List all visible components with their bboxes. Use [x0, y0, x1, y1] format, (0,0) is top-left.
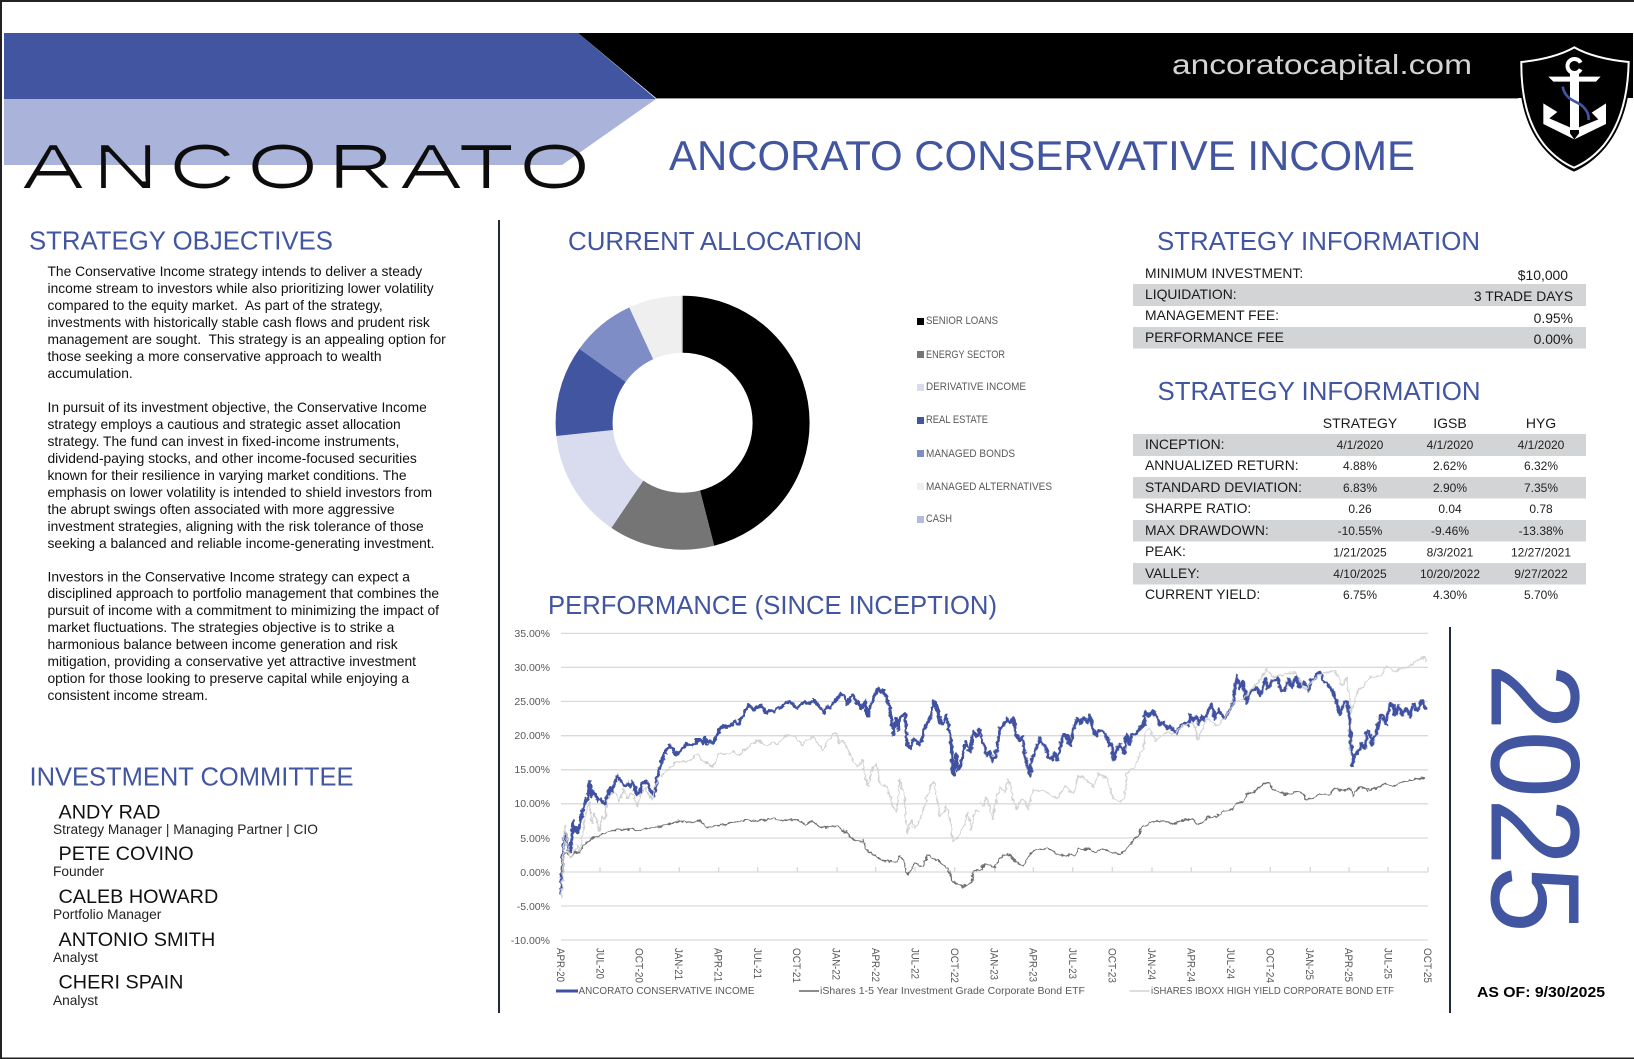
x axis labels: OCT-20 — [632, 948, 644, 983]
table: performance statistics: 10/20/2022 — [1420, 567, 1480, 581]
series: ancorato conservative income — [561, 672, 1426, 893]
heading: investment committee: INVESTMENT COMMITTEE — [30, 762, 354, 792]
panel: committee members: PETE COVINO — [58, 843, 194, 865]
text block: strategy objectives: accumulation. — [48, 365, 133, 381]
x axis labels — [554, 948, 1433, 983]
x axis labels: JUL-21 — [751, 948, 763, 979]
text block: strategy objectives: those seeking a more conservative approach to wealth — [48, 348, 382, 364]
panel: committee members: Founder — [53, 864, 105, 879]
table: performance statistics: 6.75% — [1343, 588, 1377, 602]
panel: committee members: Analyst — [53, 950, 98, 965]
panel: committee members — [53, 801, 318, 1008]
series: ishares iboxx high yield corporate bond etf — [561, 657, 1426, 897]
donut legend: ENERGY SECTOR — [926, 349, 1005, 361]
x axis labels: OCT-23 — [1106, 948, 1118, 983]
table: performance statistics: 7.35% — [1524, 481, 1558, 495]
chart legend: iShares 1-5 Year Investment Grade Corporate Bond ETF — [820, 985, 1085, 997]
table: performance statistics: IGSB — [1433, 415, 1467, 431]
y axis labels: 0.00% — [520, 867, 550, 879]
table: performance statistics: 2.62% — [1433, 459, 1467, 473]
table: strategy terms: 0.95% — [1534, 310, 1573, 326]
y axis labels: 30.00% — [514, 662, 550, 674]
heading: performance: PERFORMANCE (SINCE INCEPTION) — [548, 590, 997, 620]
x axis labels: JUL-20 — [594, 948, 606, 979]
panel: committee members: ANTONIO SMITH — [58, 929, 215, 951]
table: strategy terms: LIQUIDATION: — [1145, 286, 1237, 302]
y axis labels: -10.00% — [511, 935, 550, 947]
panel: committee members: Strategy Manager | Managing Partner | CIO — [53, 822, 318, 837]
table: performance statistics: 12/27/2021 — [1511, 546, 1571, 560]
table: performance statistics: 4.88% — [1343, 459, 1377, 473]
donut legend: REAL ESTATE — [926, 414, 988, 426]
text block: strategy objectives: In pursuit of its investment objective, the Conservative Income — [48, 399, 427, 415]
table: performance statistics: PEAK: — [1145, 543, 1186, 559]
text block: strategy objectives: option for those looking to preserve capital while enjoying a — [48, 670, 409, 686]
table: strategy terms: PERFORMANCE FEE — [1145, 329, 1284, 345]
table: strategy terms — [1133, 265, 1586, 348]
line chart: performance since inception — [511, 628, 1433, 997]
x axis labels: OCT-25 — [1421, 948, 1433, 983]
table: performance statistics: SHARPE RATIO: — [1145, 500, 1251, 516]
table: performance statistics: 6.32% — [1524, 459, 1558, 473]
y axis labels: 15.00% — [514, 764, 550, 776]
table: performance statistics: STANDARD DEVIATION: — [1145, 479, 1302, 495]
table: performance statistics: -13.38% — [1519, 524, 1564, 538]
text block: strategy objectives: compared to the equity market. As part of the strategy, — [48, 297, 383, 313]
text block: strategy objectives: harmonious balance between income generation and risk — [48, 636, 398, 652]
table: performance statistics: INCEPTION: — [1145, 436, 1224, 452]
table: strategy terms: 3 TRADE DAYS — [1474, 288, 1573, 304]
table: performance statistics: 1/21/2025 — [1333, 546, 1387, 560]
table: performance statistics: STRATEGY — [1323, 415, 1398, 431]
table: performance statistics: 4/10/2025 — [1333, 567, 1387, 581]
text block: strategy objectives: Investors in the Conservative Income strategy can expect a — [48, 568, 410, 584]
text block: strategy objectives: The Conservative Income strategy intends to deliver a steady — [48, 263, 422, 279]
chart legend — [556, 985, 1394, 997]
text block: strategy objectives: disciplined approach to portfolio management that combines the — [48, 585, 439, 601]
heading: current allocation: CURRENT ALLOCATION — [568, 226, 862, 256]
chart legend: ANCORATO CONSERVATIVE INCOME — [578, 985, 754, 997]
table: performance statistics: 4/1/2020 — [1427, 438, 1474, 452]
text block: strategy objectives: the abrupt swings often associated with more aggressive — [48, 501, 395, 517]
table: performance statistics: HYG — [1526, 415, 1556, 431]
panel: committee members: ANDY RAD — [58, 801, 160, 823]
x axis labels: JUL-25 — [1382, 948, 1394, 979]
text block: strategy objectives: market fluctuations. The strategies objective is to strike a — [48, 619, 395, 635]
x axis labels: JUL-23 — [1066, 948, 1078, 979]
header banner — [4, 33, 1633, 165]
heading: strategy information statistics: STRATEGY INFORMATION — [1158, 376, 1480, 406]
table: performance statistics: MAX DRAWDOWN: — [1145, 522, 1269, 538]
panel: committee members: Analyst — [53, 993, 98, 1008]
y axis labels — [511, 628, 550, 947]
x axis labels: JAN-22 — [830, 948, 842, 980]
table: performance statistics: 4.30% — [1433, 588, 1467, 602]
panel: committee members: CHERI SPAIN — [58, 972, 183, 994]
table: performance statistics — [1133, 415, 1586, 602]
table: strategy terms: 0.00% — [1534, 331, 1573, 347]
website url: ancoratocapital.com — [1172, 49, 1472, 80]
text block: strategy objectives: strategy. The fund can invest in fixed-income instruments, — [48, 433, 399, 449]
y axis labels: 10.00% — [514, 798, 550, 810]
text block: strategy objectives: known for their resilience in varying market conditions. The — [48, 467, 407, 483]
x axis labels: OCT-22 — [948, 948, 960, 983]
donut chart: current allocation — [584, 324, 781, 521]
icon: anchor shield logo — [1519, 44, 1631, 172]
x axis labels: OCT-24 — [1264, 948, 1276, 983]
text block: strategy objectives: seeking a balanced and reliable income-generating investment. — [48, 535, 434, 551]
x axis labels: JAN-24 — [1145, 948, 1157, 980]
x axis labels: JUL-22 — [908, 948, 920, 979]
y axis labels: 25.00% — [514, 696, 550, 708]
table: performance statistics: 6.83% — [1343, 481, 1377, 495]
panel: committee members: Portfolio Manager — [53, 907, 162, 922]
text block: strategy objectives — [48, 263, 446, 703]
x axis labels: OCT-21 — [790, 948, 802, 983]
y axis labels: 5.00% — [520, 833, 550, 845]
text block: strategy objectives: mitigation, providing a conservative yet attractive investment — [48, 653, 416, 669]
text block: strategy objectives: consistent income stream. — [48, 687, 208, 703]
table: performance statistics: 0.26 — [1348, 502, 1372, 516]
as-of date: AS OF: 9/30/2025 — [1477, 985, 1605, 1001]
x axis labels: JAN-21 — [672, 948, 684, 980]
y axis labels: 20.00% — [514, 730, 550, 742]
table: performance statistics: CURRENT YIELD: — [1145, 586, 1260, 602]
x axis labels: APR-22 — [869, 948, 881, 982]
donut legend: SENIOR LOANS — [926, 315, 998, 327]
donut legend: CASH — [926, 513, 952, 525]
x axis labels: APR-20 — [554, 948, 566, 982]
text block: strategy objectives: strategy employs a cautious and strategic asset allocation — [48, 416, 401, 432]
text block: strategy objectives: income stream to investors while also prioritizing lower volatility — [48, 280, 434, 296]
x axis labels: JAN-25 — [1303, 948, 1315, 980]
table: performance statistics: ANNUALIZED RETURN: — [1145, 457, 1299, 473]
table: performance statistics: -10.55% — [1338, 524, 1383, 538]
series: ishares 1-5 year investment grade corporate bond etf — [561, 777, 1426, 887]
heading: strategy objectives: STRATEGY OBJECTIVES — [29, 226, 333, 256]
table: strategy terms: MINIMUM INVESTMENT: — [1145, 265, 1303, 281]
panel: committee members: CALEB HOWARD — [58, 886, 218, 908]
table: performance statistics: -9.46% — [1431, 524, 1469, 538]
logo wordmark: ANCORATO — [22, 132, 591, 201]
x axis labels: JAN-23 — [988, 948, 1000, 980]
y axis labels: 35.00% — [514, 628, 550, 640]
year label: 2025 — [1464, 663, 1606, 933]
table: performance statistics: 9/27/2022 — [1514, 567, 1568, 581]
table: performance statistics: VALLEY: — [1145, 565, 1200, 581]
title: ANCORATO CONSERVATIVE INCOME — [669, 132, 1415, 179]
table: strategy terms: $10,000 — [1518, 267, 1568, 283]
table: performance statistics: 5.70% — [1524, 588, 1558, 602]
table: performance statistics: 0.04 — [1438, 502, 1462, 516]
text block: strategy objectives: investments with historically stable cash flows and prudent risk — [48, 314, 430, 330]
table: performance statistics: 2.90% — [1433, 481, 1467, 495]
text block: strategy objectives: investment strategies, aligning with the risk tolerance of those — [48, 518, 424, 534]
donut legend: MANAGED ALTERNATIVES — [926, 481, 1052, 493]
x axis labels: APR-24 — [1184, 948, 1196, 982]
table: performance statistics: 8/3/2021 — [1427, 546, 1474, 560]
x axis labels: APR-25 — [1342, 948, 1354, 982]
x axis labels: APR-23 — [1026, 948, 1038, 982]
text block: strategy objectives: dividend-paying stocks, and other income-focused securities — [48, 450, 417, 466]
text block: strategy objectives: management are sought. This strategy is an appealing option for — [48, 331, 446, 347]
table: strategy terms: MANAGEMENT FEE: — [1145, 307, 1279, 323]
chart legend: iSHARES IBOXX HIGH YIELD CORPORATE BOND ETF — [1151, 985, 1394, 997]
table: performance statistics: 4/1/2020 — [1518, 438, 1565, 452]
y axis labels: -5.00% — [517, 901, 550, 913]
text block: strategy objectives: pursuit of income with a commitment to minimizing the impact of — [48, 602, 439, 618]
x axis labels: APR-21 — [712, 948, 724, 982]
table: performance statistics: 0.78 — [1529, 502, 1553, 516]
x axis labels: JUL-24 — [1224, 948, 1236, 979]
donut legend: MANAGED BONDS — [926, 448, 1015, 460]
table: performance statistics: 4/1/2020 — [1337, 438, 1384, 452]
donut legend: DERIVATIVE INCOME — [926, 381, 1026, 393]
donut legend — [917, 315, 1052, 525]
heading: strategy information: STRATEGY INFORMATION — [1157, 226, 1480, 256]
text block: strategy objectives: emphasis on lower volatility is intended to shield investors from — [48, 484, 432, 500]
